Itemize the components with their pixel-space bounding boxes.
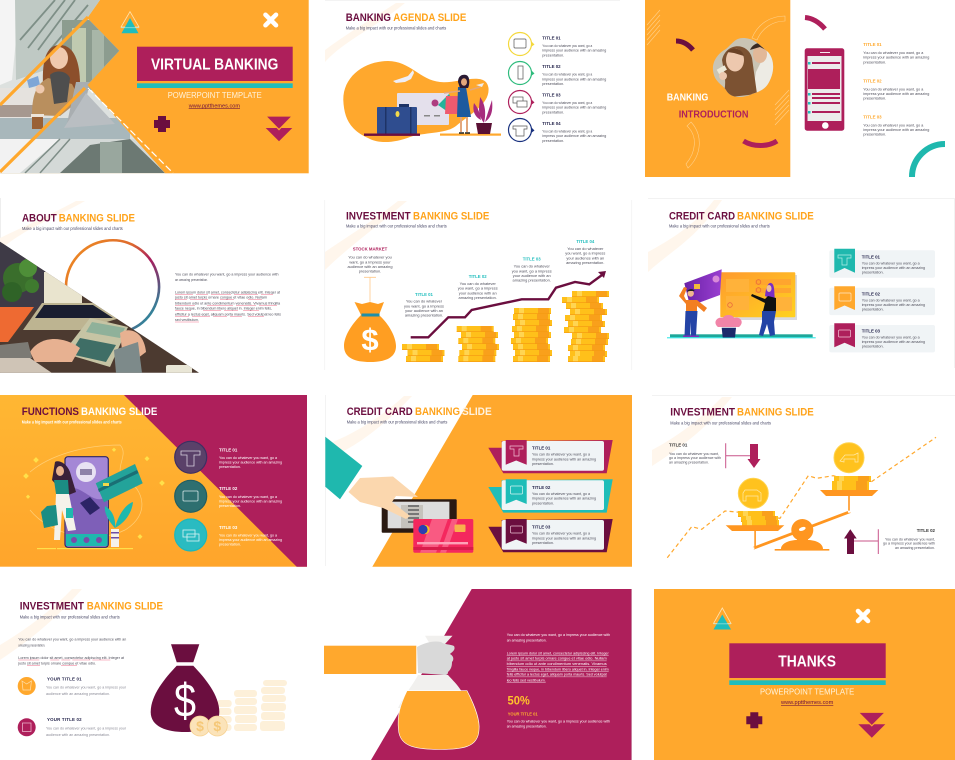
agenda item 2: You can do whatever you want, go a bbox=[542, 72, 593, 77]
function 1: You can do whatever you want, go a bbox=[219, 455, 278, 460]
intro text bbox=[507, 632, 610, 642]
lorem paragraph: Lorem ipsum dolor sit amet, consectetur adipiscing elit. Integer at bbox=[18, 655, 125, 660]
function 2: presentation. bbox=[219, 503, 241, 508]
card 2: presentation. bbox=[862, 307, 884, 312]
heading: BANKING SLIDE bbox=[737, 210, 814, 222]
icon: plus bbox=[154, 116, 170, 132]
lorem paragraph bbox=[17, 655, 125, 665]
intro text 1: You can do whatever you want, go a bbox=[863, 50, 924, 55]
title 03: you want, go a impress bbox=[512, 268, 552, 273]
item 2: audience with an amazing presentation. bbox=[46, 732, 110, 737]
title 04: amazing presentation. bbox=[566, 260, 604, 265]
heading bbox=[347, 406, 492, 418]
title 02: You can do whatever bbox=[460, 281, 496, 286]
title 01 text: go a impress your audience with bbox=[669, 455, 721, 460]
heading bbox=[669, 210, 814, 222]
lorem paragraph: justo sit amet turpis ornare congue et vitae odio. bbox=[17, 660, 96, 665]
function 1 bbox=[175, 441, 282, 473]
function 3: You can do whatever you want, go a bbox=[219, 533, 278, 538]
heading: BANKING SLIDE bbox=[413, 210, 490, 222]
about paragraph: Lorem ipsum dolor sit amet, consectetur adipiscing elit. Integer at bbox=[175, 289, 281, 294]
heading: BANKING SLIDE bbox=[81, 406, 158, 418]
about paragraph: fauce neque, in bibendum libero aliquet in. Integer enim felis, bbox=[175, 306, 272, 311]
title 01: You can do whatever bbox=[406, 299, 443, 304]
illustration: giant credit card and people bbox=[667, 269, 816, 338]
slide 12: thanks bbox=[654, 589, 955, 760]
intro text 3: You can do whatever you want, go a bbox=[863, 122, 924, 127]
card 1: impress your audience with an amazing bbox=[862, 265, 925, 270]
left coin and pan bbox=[726, 478, 784, 548]
icon: white x bbox=[858, 611, 868, 621]
function 3: presentation. bbox=[219, 542, 241, 547]
agenda item 4: impress your audience with an amazing bbox=[542, 133, 606, 138]
paragraph bbox=[507, 650, 609, 682]
title 04: your audience with an bbox=[566, 255, 604, 260]
intro text 2: TITLE 02 bbox=[863, 78, 882, 83]
title 04: You can do whatever bbox=[567, 246, 604, 251]
banner 2: TITLE 02 bbox=[532, 485, 551, 490]
heading bbox=[346, 210, 490, 222]
50 percent figure: 50% bbox=[508, 693, 530, 707]
money bag: $ bbox=[174, 674, 196, 726]
heading bbox=[346, 12, 467, 24]
heading bbox=[20, 600, 163, 612]
title 02: TITLE 02 bbox=[469, 274, 487, 279]
subtitle: POWERPOINT TEMPLATE bbox=[168, 91, 262, 100]
title 02 text: TITLE 02 bbox=[917, 528, 936, 533]
card 3 bbox=[829, 323, 935, 352]
card 2 bbox=[829, 286, 935, 315]
agenda item 3: You can do whatever you want, go a bbox=[542, 100, 593, 105]
item 1 bbox=[18, 676, 127, 696]
title 03: TITLE 03 bbox=[523, 257, 541, 262]
stock market label: STOCK MARKET bbox=[353, 246, 388, 251]
about intro text bbox=[175, 271, 278, 282]
agenda item 3: TITLE 03 bbox=[542, 92, 561, 98]
heading: banking: BANKING bbox=[667, 93, 709, 104]
agenda item 2 bbox=[508, 62, 606, 86]
intro text 1: presentation. bbox=[863, 59, 886, 64]
intro text 1: TITLE 01 bbox=[863, 42, 882, 47]
paragraph: fringilla fauce neque, in bibendum libero aliquet in. Integer enim bbox=[507, 666, 609, 671]
money bag: $ bbox=[361, 322, 379, 357]
heading: ABOUT bbox=[22, 213, 57, 225]
icon: white x bbox=[266, 15, 276, 25]
slide 9: investment banking scale bbox=[652, 395, 955, 558]
connector bbox=[364, 277, 376, 302]
icon: triangle bbox=[714, 608, 731, 630]
photo: calculator and laptop bbox=[0, 240, 200, 375]
stock market label: want, go a impress your bbox=[349, 259, 391, 264]
coin stack 1 bbox=[402, 344, 444, 362]
agenda item 1: presentation. bbox=[542, 52, 564, 57]
money bag bbox=[151, 644, 219, 732]
intro text: You can do whatever you want, go a impress your audience with bbox=[507, 632, 610, 637]
about paragraph: bibendum odio ut ante condimentum venenatis. Vivamus fringilla bbox=[175, 300, 281, 305]
heading: SLIDE bbox=[462, 406, 492, 418]
stock market label: audience with an amazing bbox=[348, 264, 392, 269]
title 04: you want, go a impress bbox=[565, 251, 605, 256]
intro text 3 bbox=[863, 114, 929, 137]
function 1: impress your audience with an amazing bbox=[219, 459, 282, 464]
function 3: TITLE 03 bbox=[219, 525, 238, 530]
heading: BANKING bbox=[346, 12, 391, 24]
illustration: hand paying with card bbox=[325, 437, 473, 553]
paragraph: at justo sit amet turpis ornare congue et vitae odio. Nullam bbox=[507, 656, 607, 661]
agenda item 4 bbox=[508, 118, 606, 143]
subtitle: POWERPOINT TEMPLATE bbox=[760, 687, 854, 696]
bag with hand bbox=[398, 636, 479, 750]
heading: AGENDA SLIDE bbox=[393, 12, 467, 24]
intro text 2: impress your audience with an amazing bbox=[863, 91, 929, 96]
subheading: Make a big impact with our professional slides and charts bbox=[22, 226, 123, 231]
intro text 2 bbox=[863, 78, 929, 101]
down arrow with bracket bbox=[726, 443, 760, 468]
about paragraph: efficitur a lectus eget, aliquam porta mauris. Sed volutpat leo felis bbox=[175, 311, 281, 316]
phone mockup bbox=[805, 48, 844, 131]
orange arm bbox=[324, 646, 416, 674]
card 2: impress your audience with an amazing bbox=[862, 302, 925, 307]
banner 2: presentation. bbox=[532, 500, 554, 505]
growth line with arrow bbox=[411, 271, 606, 337]
function 3: impress your audience with an amazing bbox=[219, 537, 282, 542]
agenda item 3: presentation. bbox=[542, 109, 564, 114]
subheading: Make a big impact with our professional slides and charts bbox=[346, 223, 447, 228]
agenda item 3: impress your audience with an amazing bbox=[542, 105, 606, 110]
slide 11: fifty percent money bag bbox=[324, 589, 632, 760]
stock market label: You can do whatever you bbox=[348, 255, 392, 260]
title 02 bbox=[458, 274, 498, 300]
up arrow with bracket bbox=[844, 529, 878, 554]
heading: introduction: INTRODUCTION bbox=[679, 109, 748, 120]
heading: CREDIT CARD bbox=[347, 406, 413, 418]
title 01 text: an amazing presentation. bbox=[669, 460, 709, 465]
paragraph: Lorem ipsum dolor sit amet, consectetur adipiscing elit. Integer bbox=[507, 650, 609, 655]
agenda item 4: TITLE 04 bbox=[542, 121, 561, 126]
about paragraph bbox=[174, 289, 281, 322]
title 01 text: TITLE 01 bbox=[669, 443, 688, 448]
agenda item 1: impress your audience with an amazing bbox=[542, 48, 606, 53]
intro text 3: impress your audience with an amazing bbox=[863, 127, 929, 132]
heading: BANKING SLIDE bbox=[87, 600, 163, 612]
heading: INVESTMENT bbox=[670, 407, 735, 419]
paragraph: felis efficitur a lectus eget, aliquam porta mauris. Sed volutpat bbox=[507, 672, 608, 677]
title banner bbox=[137, 47, 293, 88]
agenda item 2: TITLE 02 bbox=[542, 64, 561, 69]
function 1: TITLE 01 bbox=[219, 447, 238, 452]
subheading: Make a big impact with our professional slides and charts bbox=[346, 26, 446, 31]
title 02 text: You can do whatever you want, bbox=[885, 536, 935, 541]
slide 7: functions banking bbox=[0, 395, 307, 567]
intro text 3: presentation. bbox=[863, 132, 886, 137]
slide 3: banking introduction bbox=[645, 0, 945, 177]
agenda item 4: presentation. bbox=[542, 138, 564, 143]
small coins: $ bbox=[213, 718, 221, 734]
subheading: Make a big impact with our professional slides and charts bbox=[20, 614, 120, 619]
title 03 bbox=[512, 257, 552, 283]
slide 4: about banking bbox=[0, 198, 281, 375]
heading bbox=[22, 213, 135, 225]
banner 3: presentation. bbox=[532, 540, 554, 545]
card 3: impress your audience with an amazing bbox=[862, 339, 925, 344]
function 2: impress your audience with an amazing bbox=[219, 498, 282, 503]
heading: INVESTMENT bbox=[20, 600, 84, 612]
icon: chevrons bbox=[858, 712, 885, 738]
subheading: Make a big impact with our professional slides and charts bbox=[22, 419, 122, 424]
intro text 2: You can do whatever you want, go a bbox=[863, 86, 924, 91]
banner 1: You can do whatever you want, go a bbox=[532, 452, 591, 457]
title 01 text bbox=[669, 443, 721, 465]
agenda item 1 bbox=[508, 32, 606, 57]
title 02: your audience with an bbox=[459, 290, 497, 295]
slide 10: investment bag of money bbox=[0, 589, 287, 737]
card 3: presentation. bbox=[862, 344, 884, 349]
title 02 text: go a impress your audience with bbox=[883, 540, 935, 545]
coin stack 2 bbox=[457, 326, 499, 362]
gradient ring bbox=[66, 240, 159, 329]
title 02: you want, go a impress bbox=[458, 286, 498, 291]
your title 01: an amazing presentation. bbox=[507, 724, 547, 729]
title 01 text: You can do whatever you want, bbox=[669, 451, 719, 456]
banner 3: You can do whatever you want, go a bbox=[532, 531, 591, 536]
card 1 bbox=[829, 249, 935, 278]
agenda item 4: You can do whatever you want, go a bbox=[542, 128, 593, 134]
orange stripes across photo bbox=[0, 17, 88, 172]
about intro text: You can do whatever you want, go a impress your audience with bbox=[175, 271, 278, 276]
slide 6: credit card banking bbox=[648, 198, 955, 368]
agenda item 1: TITLE 01 bbox=[542, 36, 561, 40]
function 3 bbox=[175, 519, 282, 551]
function 2: TITLE 02 bbox=[219, 486, 238, 491]
title 01: your audience with an bbox=[405, 308, 443, 313]
banner 2 bbox=[488, 479, 613, 513]
paragraph: leo felis sed vestibulum. bbox=[507, 677, 546, 682]
heading: BANKING bbox=[415, 406, 460, 418]
your title 01: You can do whatever you want, go a impress your audience with bbox=[507, 718, 610, 723]
about paragraph: sed vestibulum. bbox=[175, 317, 199, 322]
icon: plus bbox=[746, 712, 762, 728]
heading bbox=[670, 407, 814, 419]
title 02: amazing presentation. bbox=[459, 295, 497, 300]
heading: INVESTMENT bbox=[346, 210, 411, 222]
card 3: You can do whatever you want, go a bbox=[862, 334, 920, 339]
icon: triangle bbox=[121, 12, 139, 33]
slide 5: investment banking growth chart bbox=[325, 200, 632, 370]
money bag bbox=[344, 302, 396, 362]
paragraph: bibendum odio ut ante condimentum venenatis. Vivamus bbox=[507, 661, 607, 666]
right coin and pan bbox=[820, 443, 878, 511]
intro text: You can do whatever you want, go a impress your audience with an bbox=[18, 636, 126, 641]
item 1: YOUR TITLE 01 bbox=[47, 676, 82, 681]
coin stack 3 bbox=[511, 308, 552, 362]
item 2: You can do whatever you want, go a impress your bbox=[46, 726, 127, 731]
banner 1: TITLE 01 bbox=[532, 446, 551, 451]
small coins bbox=[190, 716, 227, 736]
heading: BANKING SLIDE bbox=[737, 407, 814, 419]
accent arcs bbox=[676, 18, 825, 146]
title 04: TITLE 04 bbox=[576, 239, 595, 244]
title 01: TITLE 01 bbox=[415, 292, 434, 297]
dashed trend line bbox=[667, 437, 936, 558]
item 2: YOUR TITLE 02 bbox=[47, 717, 82, 722]
small coins: $ bbox=[196, 718, 204, 734]
slide 1: virtual banking cover bbox=[0, 0, 309, 174]
banner 3: TITLE 03 bbox=[532, 525, 551, 530]
title 01: you want, go a impress bbox=[404, 303, 444, 308]
subheading: Make a big impact with our professional slides and charts bbox=[347, 419, 447, 424]
heading: FUNCTIONS bbox=[22, 406, 79, 418]
subheading: Make a big impact with our professional slides and charts bbox=[669, 223, 770, 228]
banner 3: impress your audience with an amazing bbox=[532, 535, 596, 540]
title 03: amazing presentation. bbox=[513, 278, 551, 283]
title 02 text: an amazing presentation. bbox=[895, 545, 935, 550]
title banner: VIRTUAL BANKING bbox=[151, 57, 278, 74]
title 01 bbox=[404, 292, 444, 318]
item 1: You can do whatever you want, go a impress your bbox=[46, 685, 127, 690]
agenda item 2: impress your audience with an amazing bbox=[542, 76, 606, 81]
title 03: your audience with an bbox=[513, 273, 551, 278]
banner 1 bbox=[488, 440, 613, 473]
faded coin stacks bbox=[217, 680, 287, 731]
card 1: TITLE 01 bbox=[862, 255, 881, 260]
decorative hatch and outline arcs bbox=[647, 10, 789, 168]
intro text: an amazing presentation. bbox=[507, 637, 547, 642]
website link: www.pptthemes.com bbox=[780, 700, 834, 706]
agenda item 1: You can do whatever you want, go a bbox=[542, 43, 593, 48]
teal arc bbox=[912, 144, 945, 177]
slide 8: credit card payment bbox=[325, 395, 632, 567]
about paragraph: justo sit amet turpis ornare congue et vitae odio. Nullam bbox=[174, 295, 267, 300]
illustration: travel and shopping bbox=[343, 61, 501, 142]
banner 2: You can do whatever you want, go a bbox=[532, 491, 591, 496]
coin stack 4 bbox=[562, 291, 609, 362]
your title 01: YOUR TITLE 01 bbox=[508, 711, 538, 716]
banner 1: impress your audience with an amazing bbox=[532, 456, 596, 461]
heading: CREDIT CARD bbox=[669, 210, 735, 222]
illustration: shopper and giant phone bbox=[23, 445, 165, 549]
intro text 1: impress your audience with an amazing bbox=[863, 55, 929, 60]
card 3: TITLE 03 bbox=[862, 329, 881, 334]
dashed diagonal bbox=[88, 88, 173, 173]
slide 2: banking agenda bbox=[325, 0, 620, 143]
intro text 1 bbox=[863, 42, 929, 64]
stock market label bbox=[348, 246, 392, 274]
item 2 bbox=[18, 717, 127, 737]
title 02 text bbox=[883, 528, 936, 550]
item 1: audience with an amazing presentation. bbox=[46, 691, 110, 696]
title 03: You can do whatever bbox=[514, 264, 550, 269]
stock market label: presentation. bbox=[359, 269, 381, 274]
intro text bbox=[18, 636, 126, 647]
intro text: amazing presentation. bbox=[18, 642, 45, 647]
cover photo: woman with card and laptop bbox=[0, 0, 170, 174]
card 2: You can do whatever you want, go a bbox=[862, 297, 920, 302]
website link: www.pptthemes.com bbox=[188, 103, 240, 109]
intro text 3: TITLE 03 bbox=[863, 114, 882, 119]
heading: BANKING SLIDE bbox=[59, 213, 135, 225]
agenda item 2: presentation. bbox=[542, 81, 564, 86]
banner 1: presentation. bbox=[532, 461, 554, 466]
title 01: amazing presentation. bbox=[405, 313, 443, 318]
subheading: Make a big impact with our professional slides and charts bbox=[670, 420, 771, 425]
your title 01 bbox=[507, 711, 610, 729]
function 1: presentation. bbox=[219, 464, 241, 469]
about intro text: an amazing presentation. bbox=[175, 277, 208, 282]
thanks banner: THANKS bbox=[778, 654, 836, 671]
function 2 bbox=[175, 480, 282, 512]
card 1: You can do whatever you want, go a bbox=[862, 260, 920, 265]
icon: chevrons bbox=[266, 116, 292, 141]
card 2: TITLE 02 bbox=[862, 292, 881, 297]
heading bbox=[22, 406, 158, 418]
thanks banner bbox=[729, 643, 886, 685]
title 04 bbox=[565, 239, 605, 265]
intro text 2: presentation. bbox=[863, 96, 886, 101]
function 2: You can do whatever you want, go a bbox=[219, 494, 278, 499]
balance beam and fulcrum bbox=[752, 510, 850, 551]
card 1: presentation. bbox=[862, 270, 884, 275]
banner 2: impress your audience with an amazing bbox=[532, 496, 596, 501]
banner 3 bbox=[488, 519, 613, 552]
photo: two women with card bbox=[712, 38, 774, 97]
agenda item 3 bbox=[508, 90, 606, 114]
